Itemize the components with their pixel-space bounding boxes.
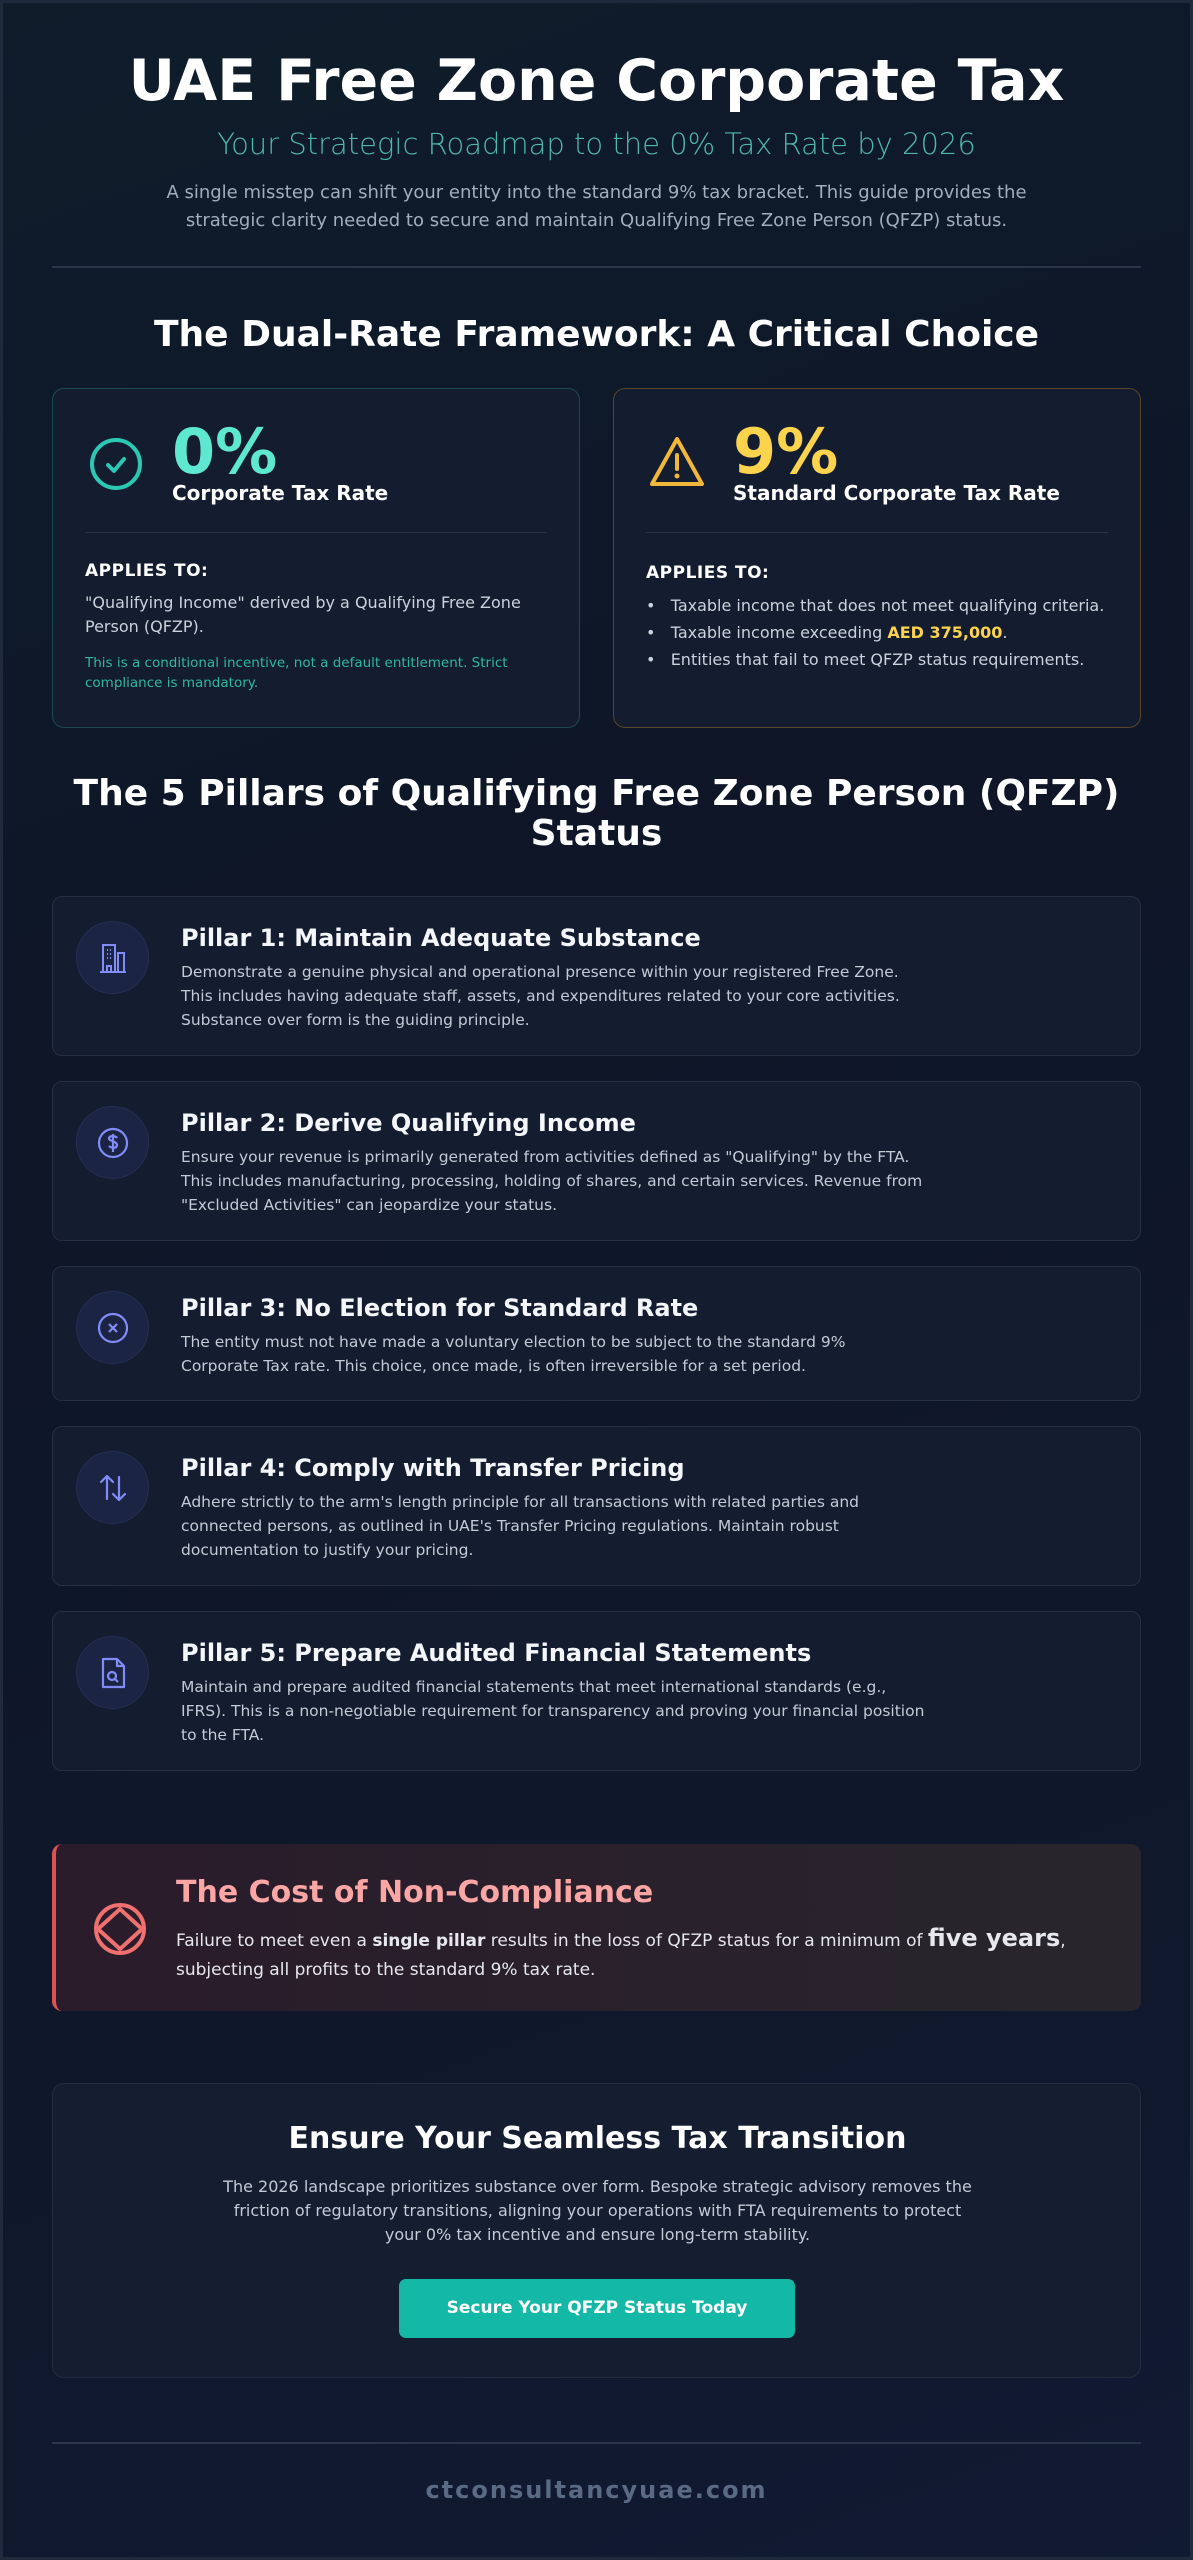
icon: dollar	[76, 1106, 149, 1179]
intro paragraph	[166, 182, 1027, 231]
button: Secure Your QFZP Status Today	[447, 2298, 747, 2318]
heading: 5 pillars: Status	[531, 813, 662, 854]
heading: 5 pillars	[74, 773, 1119, 854]
paragraph	[223, 2177, 972, 2244]
button	[399, 2279, 795, 2338]
body: Adhere strictly to the arm's length principle for all transactions with related parties and connected persons, as outlined in UAE's Transfer Pricing regulations. Maintain robust documentation to justify your pricing.	[181, 1493, 859, 1559]
applies to text: APPLIES TO:	[85, 561, 208, 581]
heading: dual-rate framework: The Dual-Rate Framework: A Critical Choice	[154, 314, 1039, 355]
body: Failure to meet even a single pillar results in the loss of QFZP status for a minimum of five years, subjecting all profits to the standard 9% tax rate.	[176, 1924, 1066, 1980]
panel: pillar 5	[52, 1611, 1141, 1771]
body: Maintain and prepare audited financial statements that meet international standards (e.g., IFRS). This is a non-negotiable requirement for transparency and proving your financial position to the FTA.	[181, 1678, 924, 1744]
big number 9%: 9%	[733, 415, 838, 488]
intro paragraph: strategic clarity needed to secure and maintain Qualifying Free Zone Person (QFZP) status.	[186, 210, 1007, 231]
paragraph: The 2026 landscape prioritizes substance over form. Bespoke strategic advisory removes the	[223, 2177, 972, 2196]
applies to list: • Taxable income exceeding AED 375,000.	[646, 623, 1007, 642]
paragraph: friction of regulatory transitions, aligning your operations with FTA requirements to protect	[234, 2201, 961, 2220]
title: Pillar 4: Comply with Transfer Pricing	[181, 1454, 685, 1482]
applies to list: • Entities that fail to meet QFZP status requirements.	[646, 650, 1084, 669]
body: The entity must not have made a voluntary election to be subject to the standard 9% Corporate Tax rate. This choice, once made, is often irreversible for a set period.	[181, 1333, 845, 1375]
applies to text	[84, 561, 521, 691]
panel: pillar 3	[52, 1266, 1141, 1401]
panel: 0% rate	[52, 388, 580, 728]
icon: check circle	[90, 438, 142, 490]
applies to text: This is a conditional incentive, not a default entitlement. Strict compliance is mandatory.	[85, 655, 508, 691]
applies to list: APPLIES TO:	[646, 563, 769, 583]
icon: building	[76, 921, 149, 994]
title: Pillar 3: No Election for Standard Rate	[181, 1294, 698, 1322]
icon: transfer arrows	[76, 1451, 149, 1524]
footer url: ctconsultancyuae.com	[425, 2476, 768, 2504]
subtitle: Your Strategic Roadmap to the 0% Tax Rate by 2026	[217, 127, 976, 161]
panel: 9% rate	[613, 388, 1141, 728]
title: Pillar 1: Maintain Adequate Substance	[181, 924, 701, 952]
body: Ensure your revenue is primarily generated from activities defined as "Qualifying" by the FTA. This includes manufacturing, processing, holding of shares, and certain services. Revenue from "Excluded Activities" can jeopardize your status.	[181, 1148, 922, 1214]
applies to list: • Taxable income that does not meet qualifying criteria.	[646, 596, 1104, 615]
callout: cost of non-compliance	[52, 1844, 1141, 2011]
label: Corporate Tax Rate	[172, 481, 388, 505]
panel: pillar 1	[52, 896, 1141, 1056]
panel: pillar 4	[52, 1426, 1141, 1586]
icon: warning diamond	[94, 1903, 146, 1955]
heading: Ensure Your Seamless Tax Transition	[288, 2121, 906, 2156]
big number 0%: 0%	[172, 415, 277, 488]
icon: x circle	[76, 1291, 149, 1364]
applies to text: "Qualifying Income" derived by a Qualifying Free Zone Person (QFZP).	[85, 593, 521, 636]
panel: pillar 2	[52, 1081, 1141, 1241]
intro paragraph: A single misstep can shift your entity into the standard 9% tax bracket. This guide provides the	[166, 182, 1027, 203]
title: Pillar 2: Derive Qualifying Income	[181, 1109, 636, 1137]
applies to list	[646, 563, 1104, 669]
heading: 5 pillars: The 5 Pillars of Qualifying Free Zone Person (QFZP)	[74, 773, 1119, 814]
icon: document search	[76, 1636, 149, 1709]
title: UAE Free Zone Corporate Tax	[129, 48, 1064, 114]
panel: call to action	[52, 2083, 1141, 2378]
label: Standard Corporate Tax Rate	[733, 481, 1060, 505]
body: Demonstrate a genuine physical and operational presence within your registered Free Zone. This includes having adequate staff, assets, and expenditures related to your core activities. Substance over form is the guiding principle.	[181, 963, 900, 1029]
paragraph: your 0% tax incentive and ensure long-term stability.	[385, 2225, 810, 2244]
title: The Cost of Non-Compliance	[176, 1875, 653, 1910]
icon: warning triangle	[650, 436, 704, 486]
title: Pillar 5: Prepare Audited Financial Statements	[181, 1639, 811, 1667]
